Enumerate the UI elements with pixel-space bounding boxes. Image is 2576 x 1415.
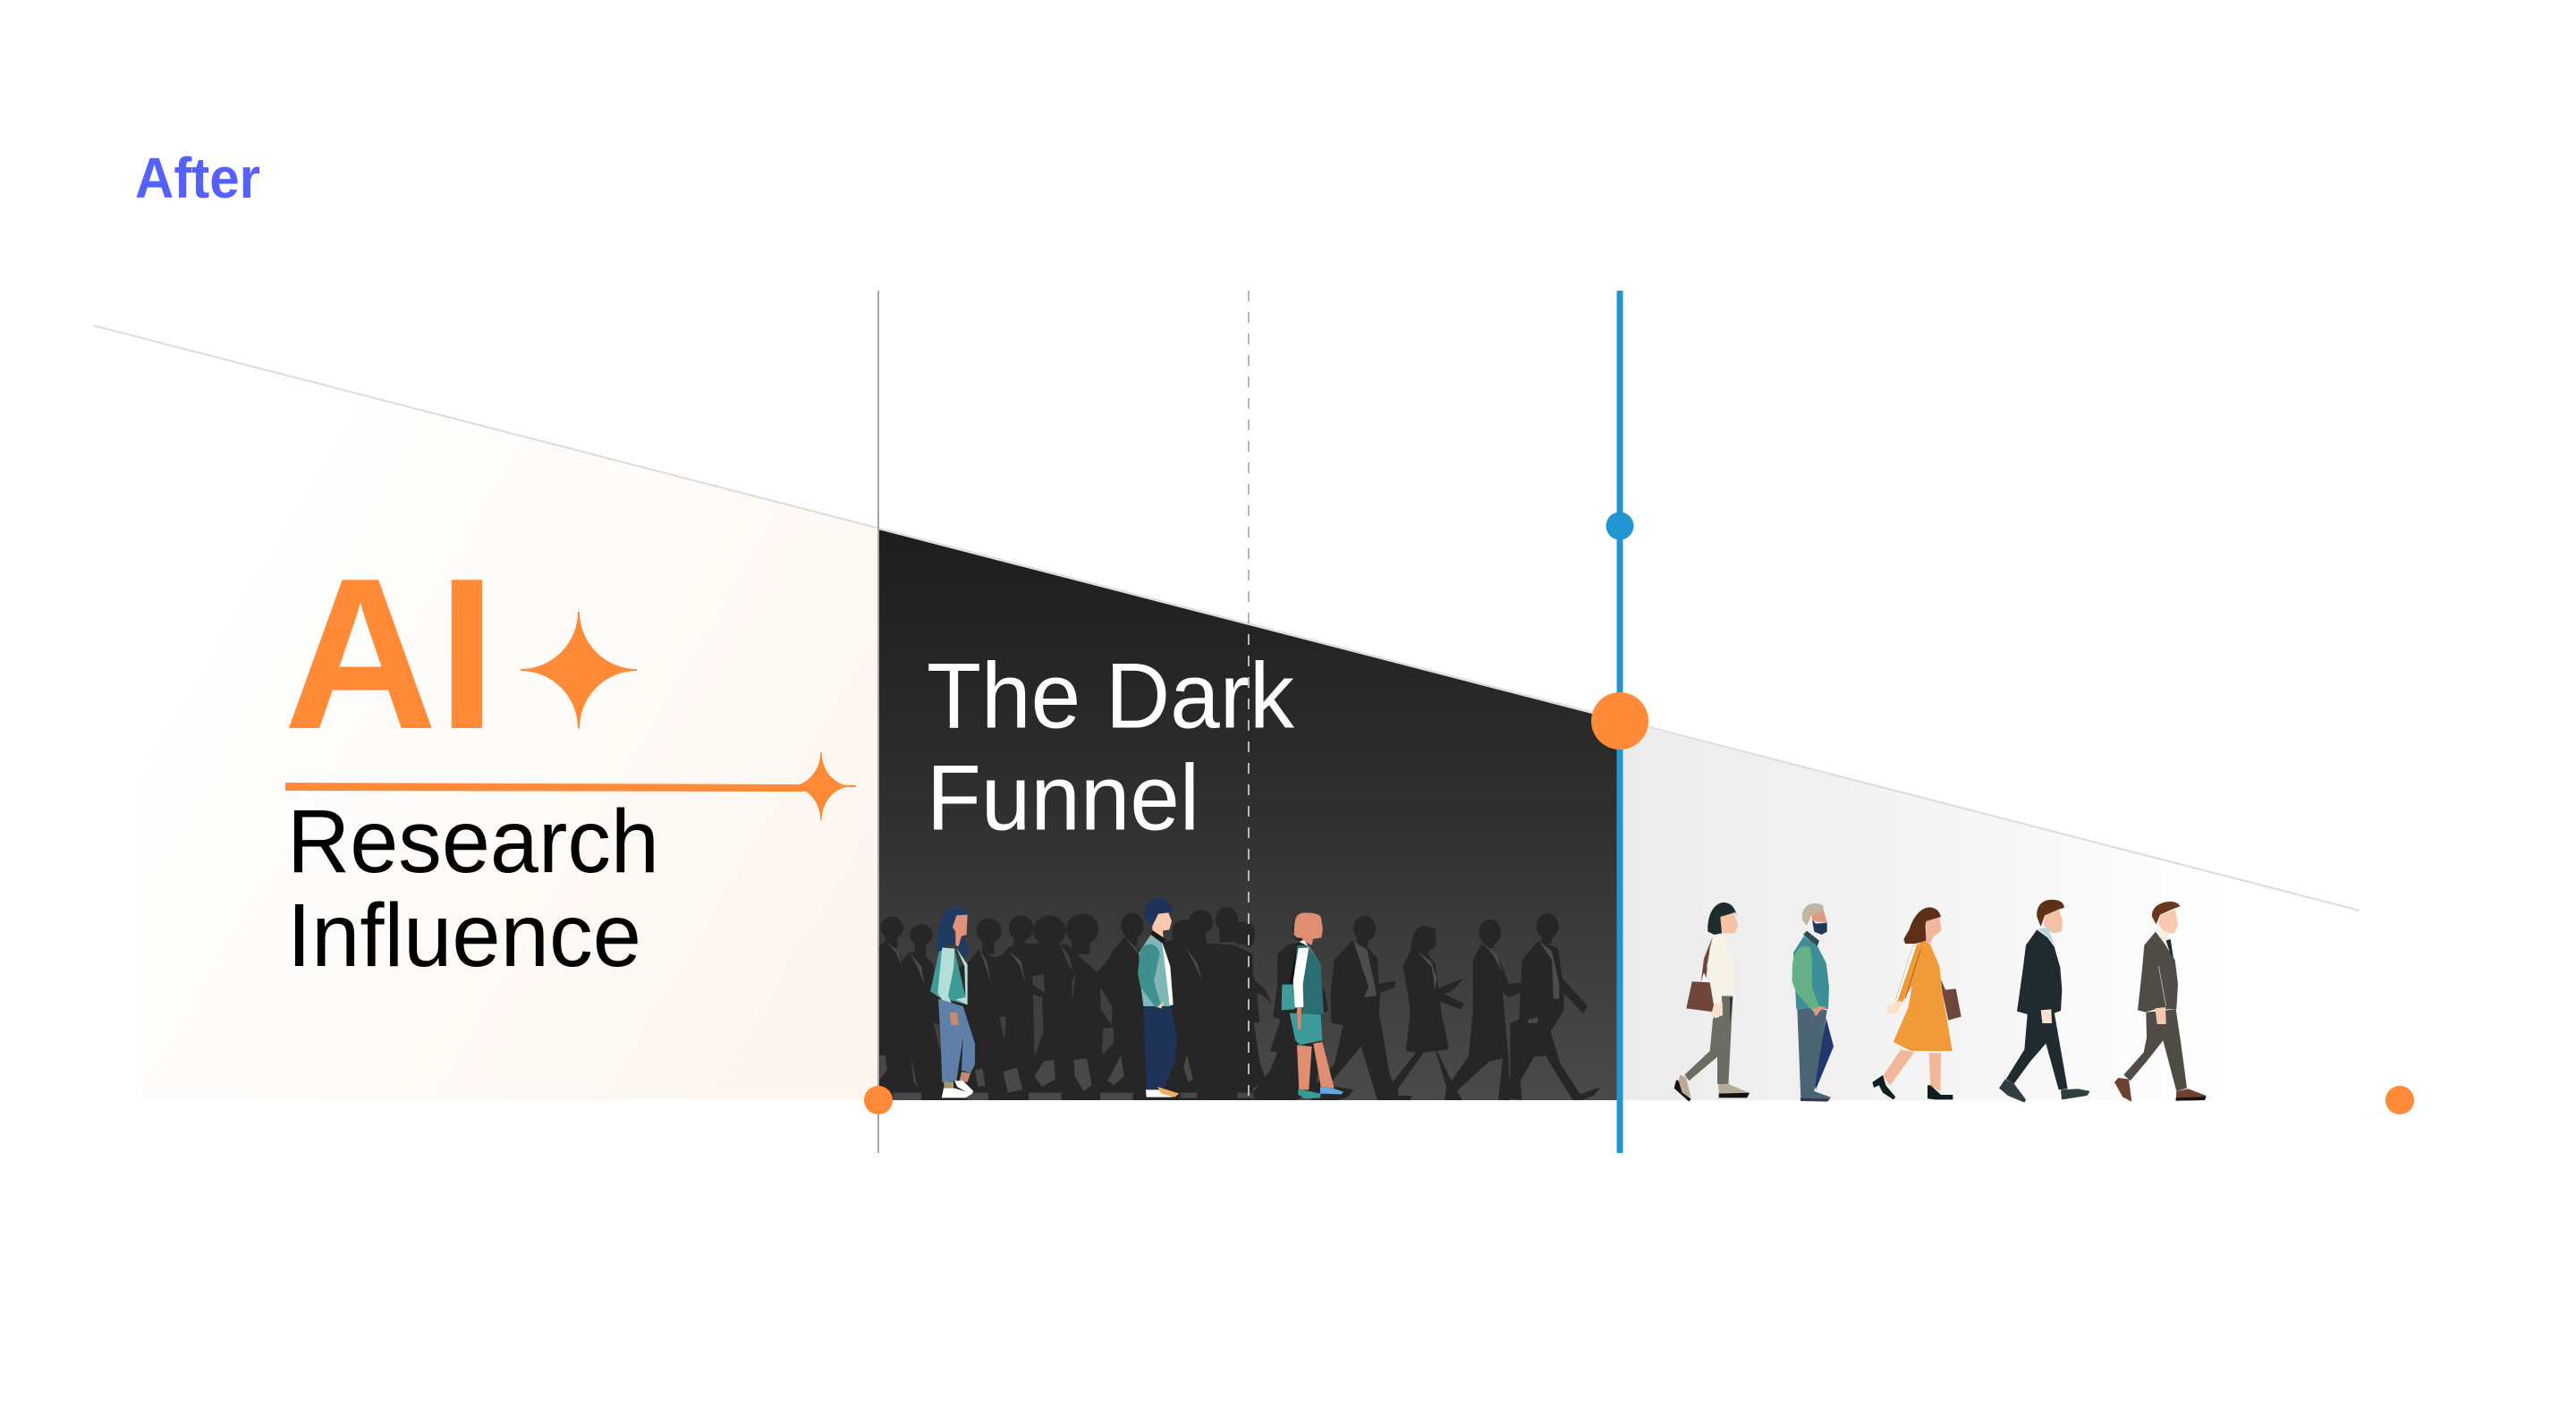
heading: AI with sparkle: AI: [284, 534, 496, 775]
panel: fading visible funnel: [1620, 721, 2227, 1100]
divider with sparkle: [285, 752, 856, 820]
gaps between silhouettes: [933, 944, 1114, 1057]
heading: The Dark Funnel: The Dark: [927, 644, 1295, 748]
person: man in dark suit: [1999, 900, 2090, 1103]
heading: The Dark Funnel: [927, 644, 1295, 850]
person: woman with folder: [1282, 912, 1343, 1098]
heading: Research Influence: Influence: [287, 885, 641, 986]
large orange marker dot: [1591, 692, 1648, 750]
person: woman in orange dress: [1872, 907, 1962, 1099]
funnel top edge line: [94, 326, 2360, 911]
person: man in grey suit: [2114, 902, 2207, 1102]
dashed vertical line: [1248, 291, 1250, 1100]
crowd silhouettes right of the dashed line: [1241, 913, 1601, 1100]
crowd silhouettes left of the dashed line: [879, 907, 1253, 1100]
heading: AI with sparkle: [284, 534, 637, 775]
lapels: [1353, 942, 1559, 1023]
panel: dark funnel: [878, 530, 1620, 1100]
icon: sparkle: [521, 612, 637, 728]
person: woman with brown bag: [1674, 902, 1750, 1102]
blue marker dot: [1606, 512, 1633, 540]
heading: The Dark Funnel: Funnel: [927, 746, 1199, 850]
left vertical marker line: [877, 291, 879, 1153]
panel: AI research influence background: [94, 326, 878, 1100]
orange dot on left line: [864, 1086, 893, 1114]
person: woman in mint jacket: [930, 908, 975, 1097]
heading: Research Influence: [287, 792, 659, 986]
orange dot at far right: [2385, 1086, 2414, 1114]
lapels: [886, 936, 1224, 984]
heading: Research Influence: Research: [287, 792, 659, 892]
label: After: After: [135, 146, 260, 210]
person: man in teal jacket: [1138, 898, 1179, 1097]
blue vertical marker line: [1617, 291, 1623, 1153]
person: bearded man in teal vest: [1792, 903, 1834, 1102]
